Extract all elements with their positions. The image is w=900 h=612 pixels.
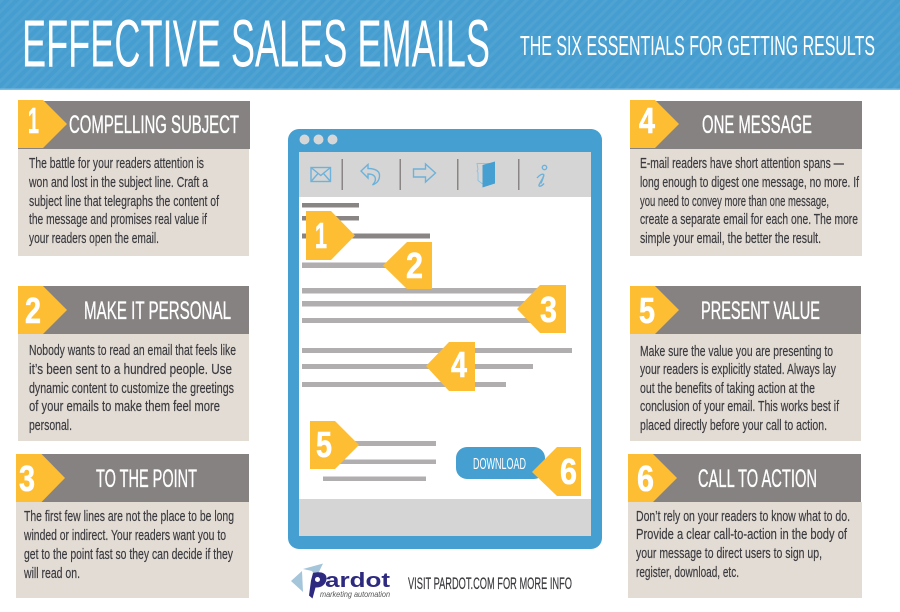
body text: The first few lines are not the place to be long [24, 508, 234, 525]
text lines [302, 203, 572, 481]
footer bar [299, 499, 591, 536]
body text: subject line that telegraphs the content of [29, 193, 220, 210]
body text: out the benefits of taking action at the [640, 380, 815, 397]
marker 1 [306, 211, 355, 260]
body text: dynamic content to customize the greetings [29, 380, 234, 397]
panel: 3 to the point: 3 [19, 458, 35, 499]
marker 2: 2 [406, 245, 423, 286]
panel: 2 make it personal: 2 [25, 290, 41, 331]
panel: 6 call to action [628, 454, 862, 598]
panel: 4 one message [630, 100, 862, 256]
heading: COMPELLING SUBJECT [69, 111, 239, 139]
body text [640, 343, 840, 434]
marker 4: 4 [451, 344, 467, 385]
marker 5 [310, 421, 359, 469]
footer call to visit: VISIT PARDOT.COM FOR MORE INFO [408, 574, 572, 593]
pardot logo: ardot [325, 570, 390, 592]
marker 6: 6 [560, 451, 577, 492]
body text: placed directly before your call to action. [640, 417, 827, 434]
icon: envelope [311, 168, 330, 182]
body text: won and lost in the subject line. Craft a [28, 174, 208, 191]
marker 4 [426, 342, 475, 391]
heading: TO THE POINT [96, 465, 197, 493]
heading: ONE MESSAGE [702, 111, 812, 139]
download button: DOWNLOAD [473, 456, 526, 473]
body text: simple your email, the better the result. [640, 230, 821, 247]
toolbar [299, 152, 591, 197]
panel: 2 make it personal [18, 286, 249, 441]
title: EFFECTIVE SALES EMAILS [22, 6, 490, 82]
icon: info [537, 165, 547, 186]
body text [23, 508, 234, 582]
panel: 1 compelling subject [18, 100, 250, 256]
marker 3: 3 [540, 289, 557, 330]
marker 3 [517, 285, 566, 333]
icon: reply arrow [361, 164, 380, 185]
marker 6 [532, 447, 581, 496]
body text [640, 155, 860, 247]
body text [28, 155, 220, 247]
pardot logo [291, 564, 390, 599]
body text [636, 508, 850, 581]
body text: your message to direct users to sign up, [636, 545, 822, 562]
heading: PRESENT VALUE [701, 297, 820, 325]
panel: 6 call to action: 6 [637, 458, 654, 499]
heading: CALL TO ACTION [698, 465, 817, 493]
body text: Nobody wants to read an email that feels like [29, 342, 236, 359]
body text [29, 342, 236, 434]
panel: 5 present value: 5 [639, 290, 655, 331]
panel: 4 one message: 4 [639, 100, 655, 141]
body text: your readers open the email. [29, 230, 159, 247]
icon: forward arrow [414, 164, 436, 182]
body text: will read on. [23, 565, 80, 582]
marker 2 [383, 242, 432, 289]
body text: personal. [29, 417, 72, 434]
marker 1: 1 [315, 215, 327, 256]
body text: get to the point fast so they can decide if they [24, 546, 233, 563]
panel: 5 present value [630, 286, 861, 441]
body text: it’s been sent to a hundred people. Use [29, 361, 232, 378]
marker 5: 5 [316, 424, 332, 465]
icon: book [477, 162, 495, 188]
body text: winded or indirect. Your readers want you to [23, 527, 226, 544]
body text: of your emails to make them feel more [29, 398, 220, 415]
header banner [0, 0, 900, 90]
panel: 1 compelling subject: 1 [28, 100, 39, 141]
body text: the message and promises real value if [29, 211, 208, 228]
heading: MAKE IT PERSONAL [84, 297, 231, 325]
email window illustration [288, 129, 602, 549]
pardot logo: marketing automation [320, 589, 390, 599]
panel: 3 to the point [16, 454, 249, 598]
body text: The battle for your readers attention is [29, 155, 204, 172]
body text: register, download, etc. [636, 564, 739, 581]
download button [456, 447, 545, 479]
